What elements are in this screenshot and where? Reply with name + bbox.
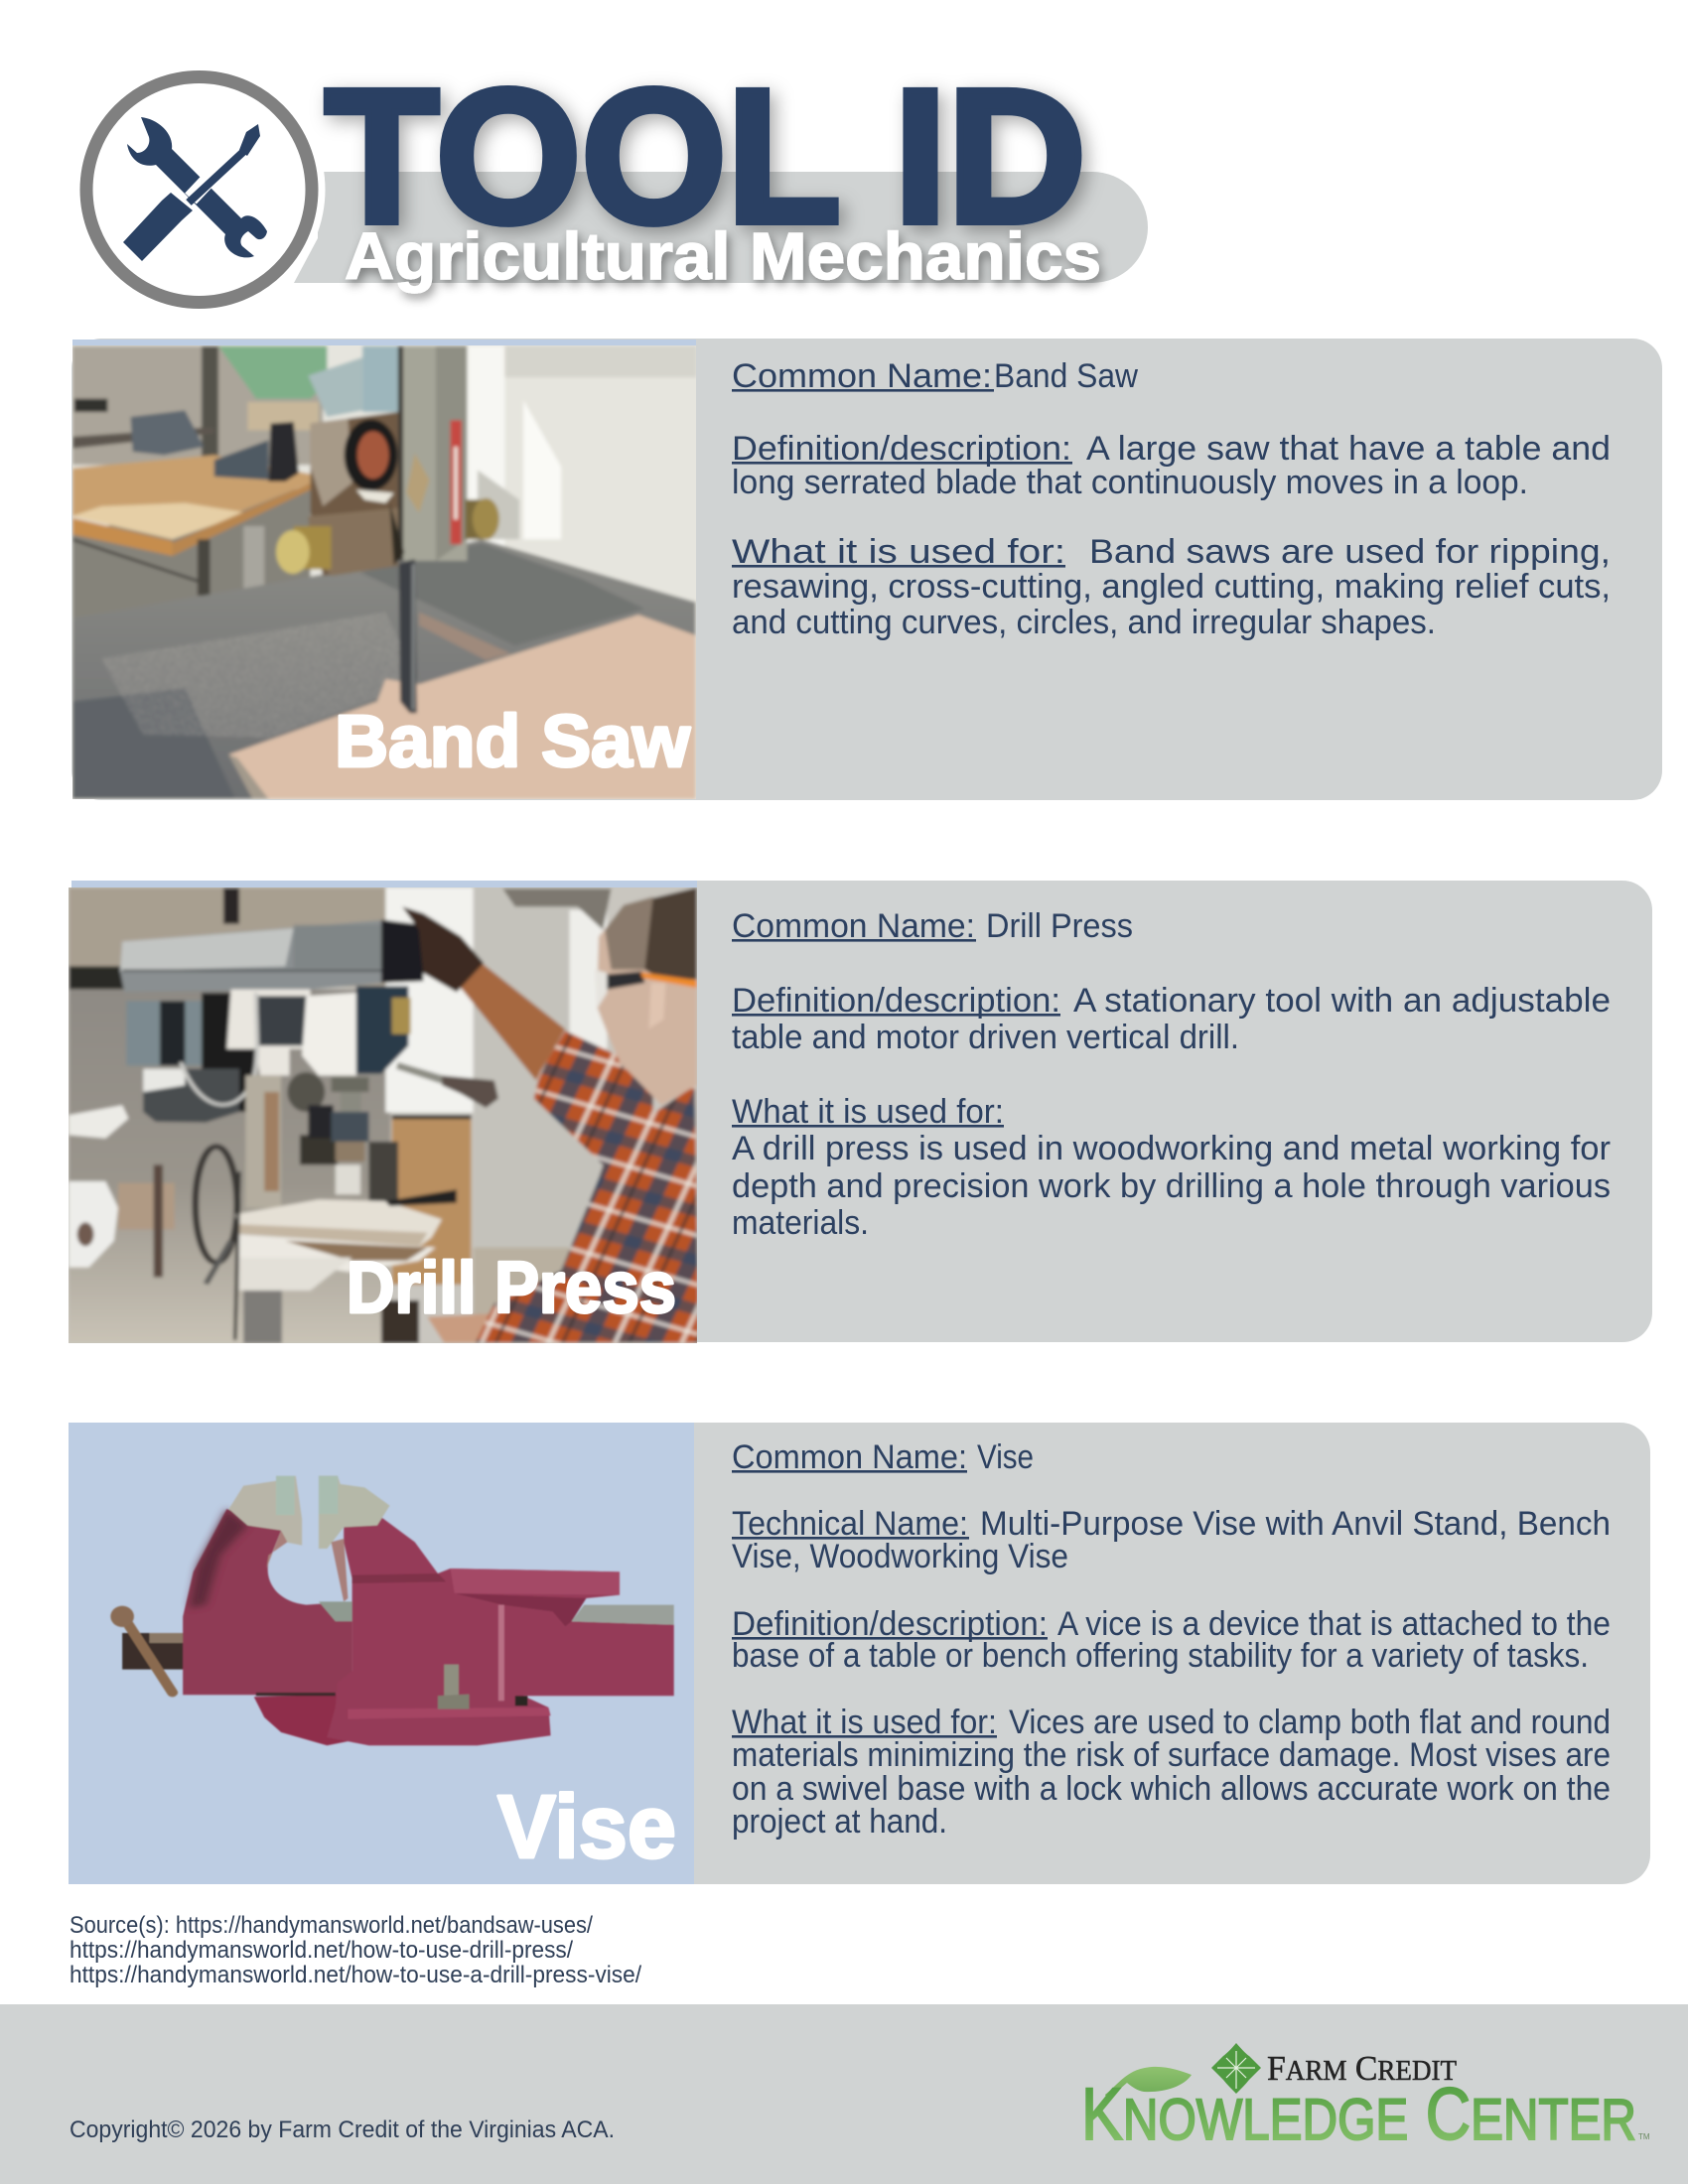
icon: farm credit diamond bbox=[1211, 2043, 1261, 2094]
footer bbox=[0, 2004, 1688, 2184]
panel: band saw bbox=[60, 328, 1662, 824]
panel background bbox=[71, 1423, 1650, 1884]
title band bbox=[294, 172, 1148, 283]
subtitle: Agricultural Mechanics: Agricultural Mechanics bbox=[345, 219, 1101, 294]
text: drill press details: depth and precision work by drilling a hole through various bbox=[732, 1167, 1611, 1205]
text: vise details: Technical Name: bbox=[732, 1505, 968, 1543]
text: vise details: base of a table or bench offering stability for a variety of tasks. bbox=[732, 1637, 1589, 1675]
title: TOOL ID: ID bbox=[894, 50, 1086, 262]
text: band saw details bbox=[732, 357, 1611, 641]
text: band saw details: Band Saw bbox=[994, 357, 1138, 395]
panel: drill press bbox=[60, 874, 1652, 1353]
text: drill press details: Drill Press bbox=[986, 907, 1133, 945]
text: band saw details: Definition/description: bbox=[732, 430, 1071, 468]
text: trademark: TM bbox=[1638, 2132, 1650, 2141]
text: band saw details: A large saw that have a table and bbox=[1086, 430, 1611, 468]
photo label: Band Saw: Band Saw bbox=[335, 700, 690, 782]
panel background bbox=[71, 339, 1662, 800]
text: vise details: What it is used for: bbox=[732, 1704, 997, 1741]
text: vise details bbox=[732, 1438, 1611, 1841]
text: band saw details: Band saws are used for ripping, bbox=[1089, 533, 1611, 571]
header: tool id logo bbox=[73, 50, 1148, 316]
text: drill press details: A stationary tool with an adjustable bbox=[1073, 982, 1611, 1020]
text: vise details: Vise bbox=[977, 1438, 1034, 1476]
icon: wrench and screwdriver badge bbox=[73, 64, 326, 316]
title: TOOL ID: TOOL bbox=[325, 50, 841, 262]
text: drill press details: Common Name: bbox=[732, 907, 975, 945]
text: vise details: Common Name: bbox=[732, 1438, 967, 1476]
photo: drill press bbox=[69, 887, 697, 1343]
copyright: Copyright© 2026 by Farm Credit of the Virginias ACA. bbox=[70, 2116, 615, 2143]
footer band bbox=[0, 2004, 1688, 2184]
panel background bbox=[71, 881, 1652, 1342]
photo: vise bbox=[69, 1423, 694, 1884]
photo label: Drill Press: Drill Press bbox=[347, 1248, 676, 1328]
text: vise details: materials minimizing the risk of surface damage. Most vises are bbox=[732, 1736, 1611, 1774]
text: vise details: Vices are used to clamp both flat and round bbox=[1009, 1704, 1611, 1741]
text: band saw details: long serrated blade that continuously moves in a loop. bbox=[732, 464, 1528, 501]
text: KNOWLEDGE CENTER: KNOWLEDGE CENTER bbox=[1081, 2073, 1636, 2155]
sources: https://handymansworld.net/how-to-use-drill-press/ bbox=[70, 1937, 573, 1964]
panel: vise bbox=[69, 1423, 1650, 1884]
text: band saw details: Common Name: bbox=[732, 357, 992, 395]
text: band saw details: resawing, cross-cutting, angled cutting, making relief cuts, bbox=[732, 568, 1611, 606]
text: FARM CREDIT: FARM CREDIT bbox=[1267, 2049, 1457, 2088]
sources bbox=[70, 1912, 641, 1988]
text: vise details: Vise, Woodworking Vise bbox=[732, 1538, 1068, 1575]
sources: https://handymansworld.net/how-to-use-a-drill-press-vise/ bbox=[70, 1962, 641, 1988]
text: vise details: A vice is a device that is attached to the bbox=[1057, 1605, 1611, 1643]
text: drill press details: What it is used for: bbox=[732, 1093, 1004, 1131]
text: band saw details: What it is used for: bbox=[732, 533, 1065, 571]
title: TOOL ID bbox=[325, 50, 1086, 262]
text: band saw details: and cutting curves, circles, and irregular shapes. bbox=[732, 604, 1436, 641]
photo: band saw bbox=[72, 345, 696, 799]
text: vise details: Multi-Purpose Vise with Anvil Stand, Bench bbox=[980, 1505, 1611, 1543]
text: vise details: on a swivel base with a lock which allows accurate work on the bbox=[732, 1770, 1611, 1808]
text: vise details: project at hand. bbox=[732, 1803, 947, 1841]
text: drill press details: A drill press is used in woodworking and metal working for bbox=[732, 1130, 1611, 1167]
text: drill press details: table and motor driven vertical drill. bbox=[732, 1019, 1239, 1056]
text: drill press details: materials. bbox=[732, 1204, 869, 1242]
logo: Farm Credit Knowledge Center bbox=[1081, 2043, 1650, 2155]
text: vise details: Definition/description: bbox=[732, 1605, 1048, 1643]
text: drill press details: Definition/description: bbox=[732, 982, 1060, 1020]
photo label: Vise: Vise bbox=[497, 1778, 676, 1877]
text: drill press details bbox=[732, 907, 1611, 1242]
sources: Source(s): https://handymansworld.net/bandsaw-uses/ bbox=[70, 1912, 593, 1939]
icon: leaf bbox=[1105, 2067, 1192, 2101]
